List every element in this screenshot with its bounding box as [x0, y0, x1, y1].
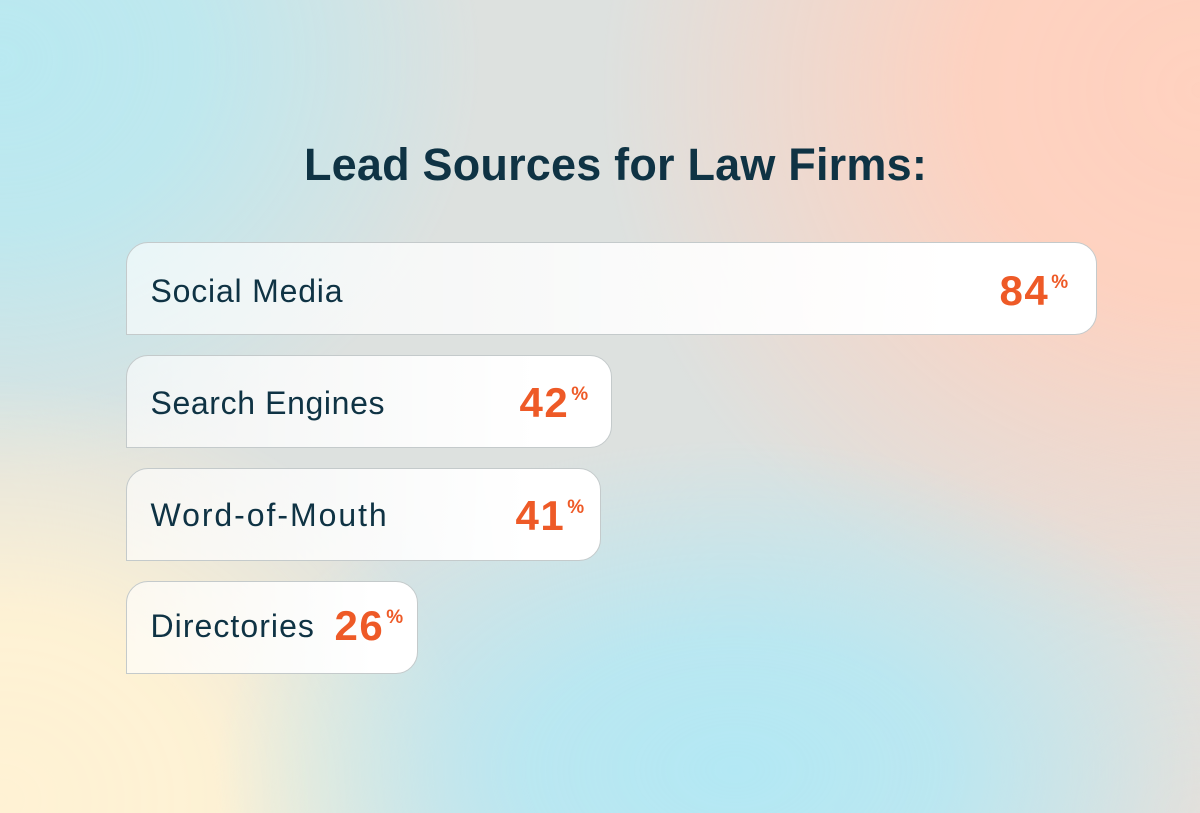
- bar: Social Media 84%: %: [1051, 272, 1068, 293]
- bar: Social Media 84%: [126, 242, 1096, 335]
- bar: Search Engines 42%: [126, 355, 612, 448]
- bar: Word-of-Mouth 41%: [126, 468, 600, 561]
- value: 42%: 42: [520, 379, 569, 426]
- label: Social Media: Social Media: [150, 273, 343, 309]
- label: Word-of-Mouth: Word-of-Mouth: [150, 497, 389, 533]
- bar: Directories 26%: [126, 581, 418, 674]
- bar: Directories 26%: %: [386, 607, 403, 628]
- label: Directories: Directories: [150, 608, 315, 644]
- bar: Search Engines 42%: %: [571, 384, 588, 405]
- value: 41%: 41: [516, 492, 565, 539]
- bar: Word-of-Mouth 41%: %: [567, 497, 584, 518]
- value: 26%: 26: [334, 602, 384, 649]
- value: 84%: 84: [1000, 267, 1049, 314]
- title: Lead Sources for Law Firms:: [304, 139, 927, 190]
- label: Search Engines: Search Engines: [150, 385, 385, 421]
